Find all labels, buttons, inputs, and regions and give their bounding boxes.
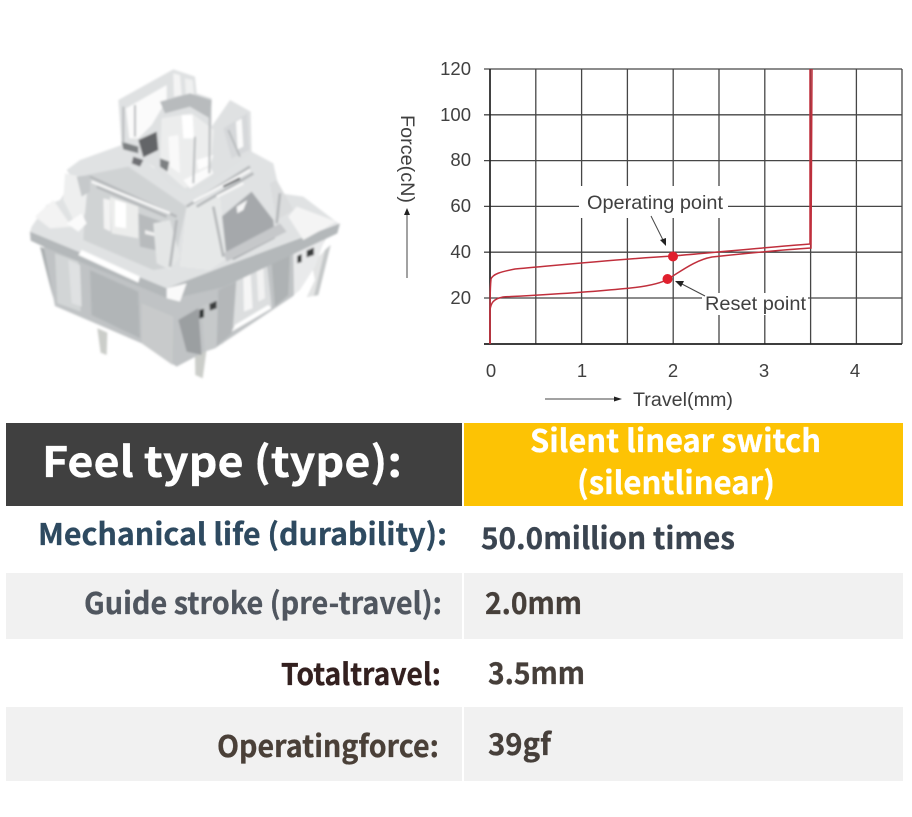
y axis numbers: 80: [450, 149, 471, 170]
y axis numbers: 20: [450, 287, 471, 308]
row: mechanical life: 50.0million times: [481, 514, 735, 558]
label backgrounds: [579, 186, 808, 315]
y axis numbers: 100: [440, 104, 471, 125]
row: feel type: [6, 416, 903, 506]
reset point marker: [662, 274, 672, 284]
row: guide stroke: [6, 573, 903, 639]
force curves: [490, 69, 812, 344]
row: feel type: (silentlinear): [577, 458, 775, 503]
x axis numbers: 0: [486, 360, 496, 381]
chart grid: [484, 69, 902, 344]
y axis numbers: 60: [450, 195, 471, 216]
row: operating force: Operatingforce:: [217, 722, 439, 766]
row: guide stroke: Guide stroke (pre-travel):: [84, 579, 442, 623]
y axis title: Force(cN): [396, 115, 417, 203]
switch stem: [118, 69, 252, 193]
row: feel type: Silent linear switch: [530, 416, 821, 461]
row: total travel: Totaltravel:: [281, 650, 441, 694]
switch lower housing: [43, 237, 327, 367]
y axis numbers: 40: [450, 241, 471, 262]
row: total travel: [281, 649, 585, 694]
y axis arrow: [404, 208, 410, 278]
row: mechanical life: Mechanical life (durability):: [38, 510, 447, 554]
row: total travel: 3.5mm: [488, 649, 585, 693]
x axis numbers: 2: [668, 360, 678, 381]
row: operating force: [6, 707, 903, 781]
x axis numbers: 1: [577, 360, 587, 381]
operating point marker: [668, 252, 678, 262]
row: operating force: 39gf: [488, 720, 553, 764]
y axis numbers: [440, 58, 471, 308]
icon: transparent mechanical switch: [30, 69, 340, 378]
x axis numbers: 4: [850, 360, 860, 381]
x axis numbers: [486, 360, 860, 381]
x axis arrow: [545, 396, 622, 402]
callout labels: [587, 192, 807, 315]
chart: force vs travel: [396, 58, 902, 411]
row: guide stroke: 2.0mm: [485, 579, 582, 623]
switch pins: [97, 328, 207, 378]
x axis title: Travel(mm): [633, 390, 733, 411]
row: mechanical life: [38, 510, 735, 558]
callout labels: Reset point: [705, 293, 807, 315]
callout arrows: [651, 216, 705, 296]
table: specs: [6, 416, 903, 781]
x axis numbers: 3: [759, 360, 769, 381]
y axis numbers: 120: [440, 58, 471, 79]
switch upper housing: [30, 145, 340, 319]
switch side clips: [40, 245, 331, 298]
callout labels: Operating point: [587, 192, 724, 214]
row: feel type: Feel type (type):: [42, 429, 402, 490]
